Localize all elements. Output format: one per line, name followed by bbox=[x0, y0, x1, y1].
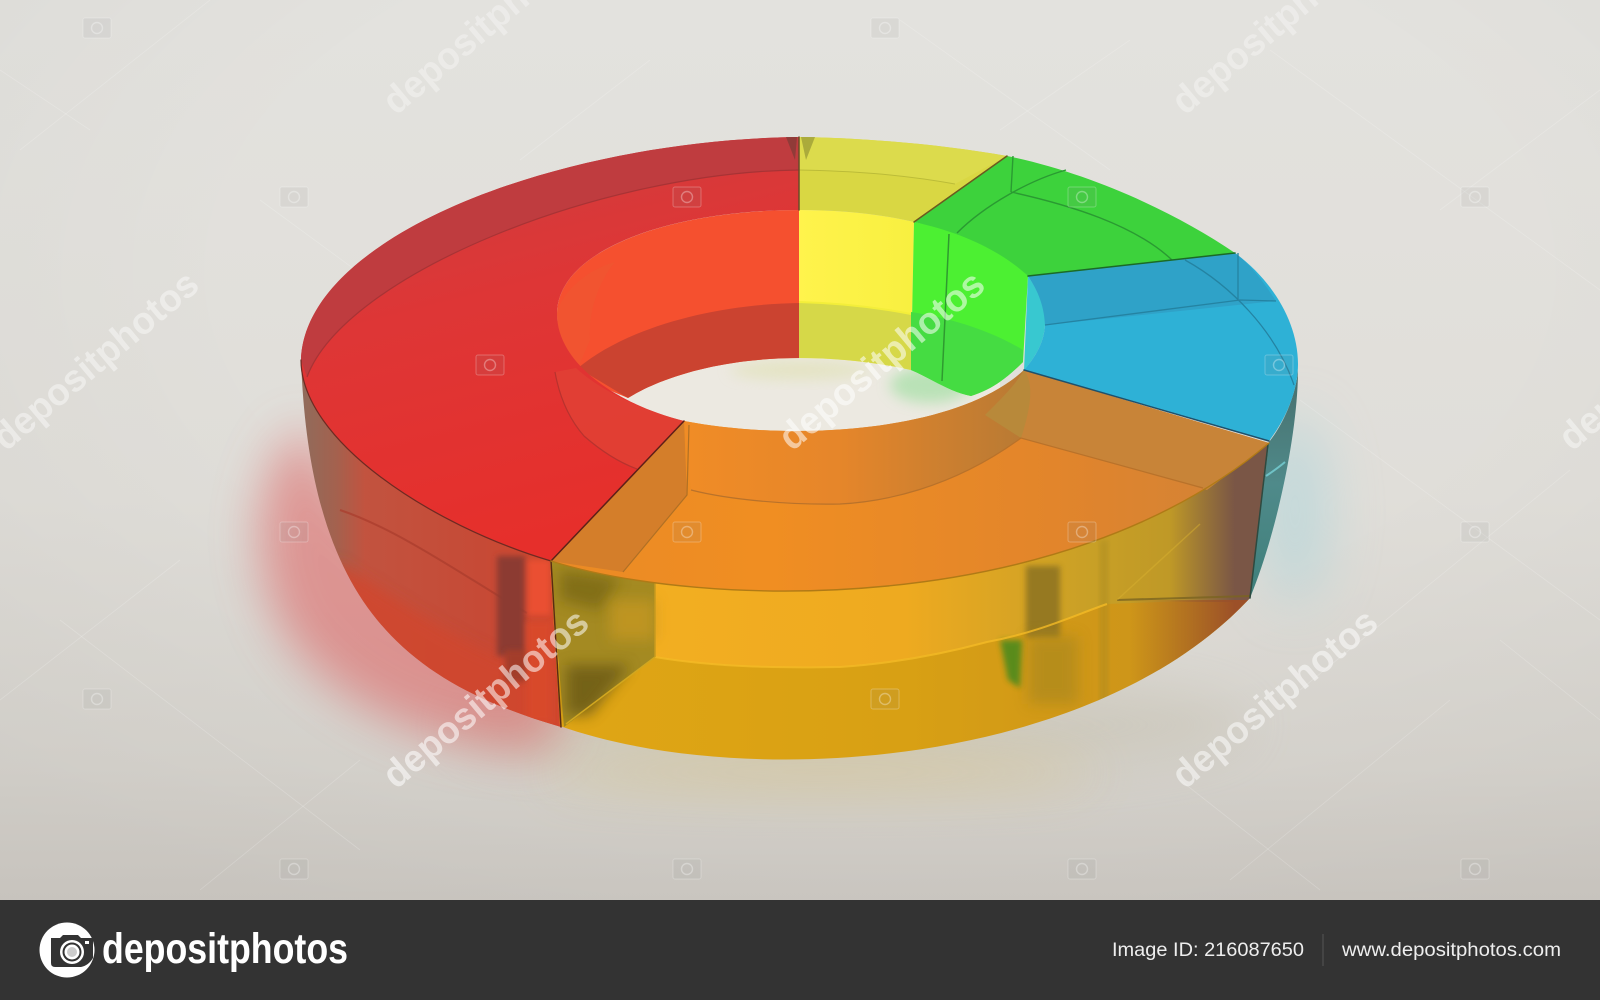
panel: side wall red bbox=[302, 373, 560, 727]
image id: Image ID: 216087650 bbox=[1112, 939, 1304, 961]
watermark texts bbox=[0, 0, 1600, 797]
watermark texts: depositphotos bbox=[1164, 601, 1386, 797]
panel: inner wall blue sliver bbox=[1024, 276, 1045, 370]
panel: inner wall green bbox=[911, 222, 1028, 396]
panel: top face orange bbox=[550, 370, 1269, 591]
panel: inner wall red bbox=[557, 210, 800, 398]
watermark texts: depositphotos bbox=[771, 263, 993, 459]
panel: inner wall yellow bbox=[799, 210, 914, 370]
watermark texts: depositphotos bbox=[375, 601, 597, 797]
segment edge lines bbox=[301, 137, 1269, 727]
panel: top face green bbox=[914, 156, 1235, 276]
logo wordmark: depositphotos bbox=[102, 925, 348, 973]
floor shadow and colour glow bbox=[260, 415, 1329, 786]
panel: side wall orange bbox=[550, 444, 1269, 760]
icon: camera logo bbox=[40, 922, 94, 978]
donut hole floor bbox=[620, 350, 1000, 440]
website url: www.depositphotos.com bbox=[1341, 939, 1561, 961]
panel: top face red bbox=[301, 137, 799, 561]
watermark camera icons bbox=[83, 18, 1489, 879]
footer bar bbox=[0, 900, 1600, 1000]
panel: top face yellow bbox=[799, 137, 1007, 222]
panel: side wall blue bbox=[1250, 370, 1298, 598]
panel: top face blue bbox=[1024, 253, 1298, 441]
